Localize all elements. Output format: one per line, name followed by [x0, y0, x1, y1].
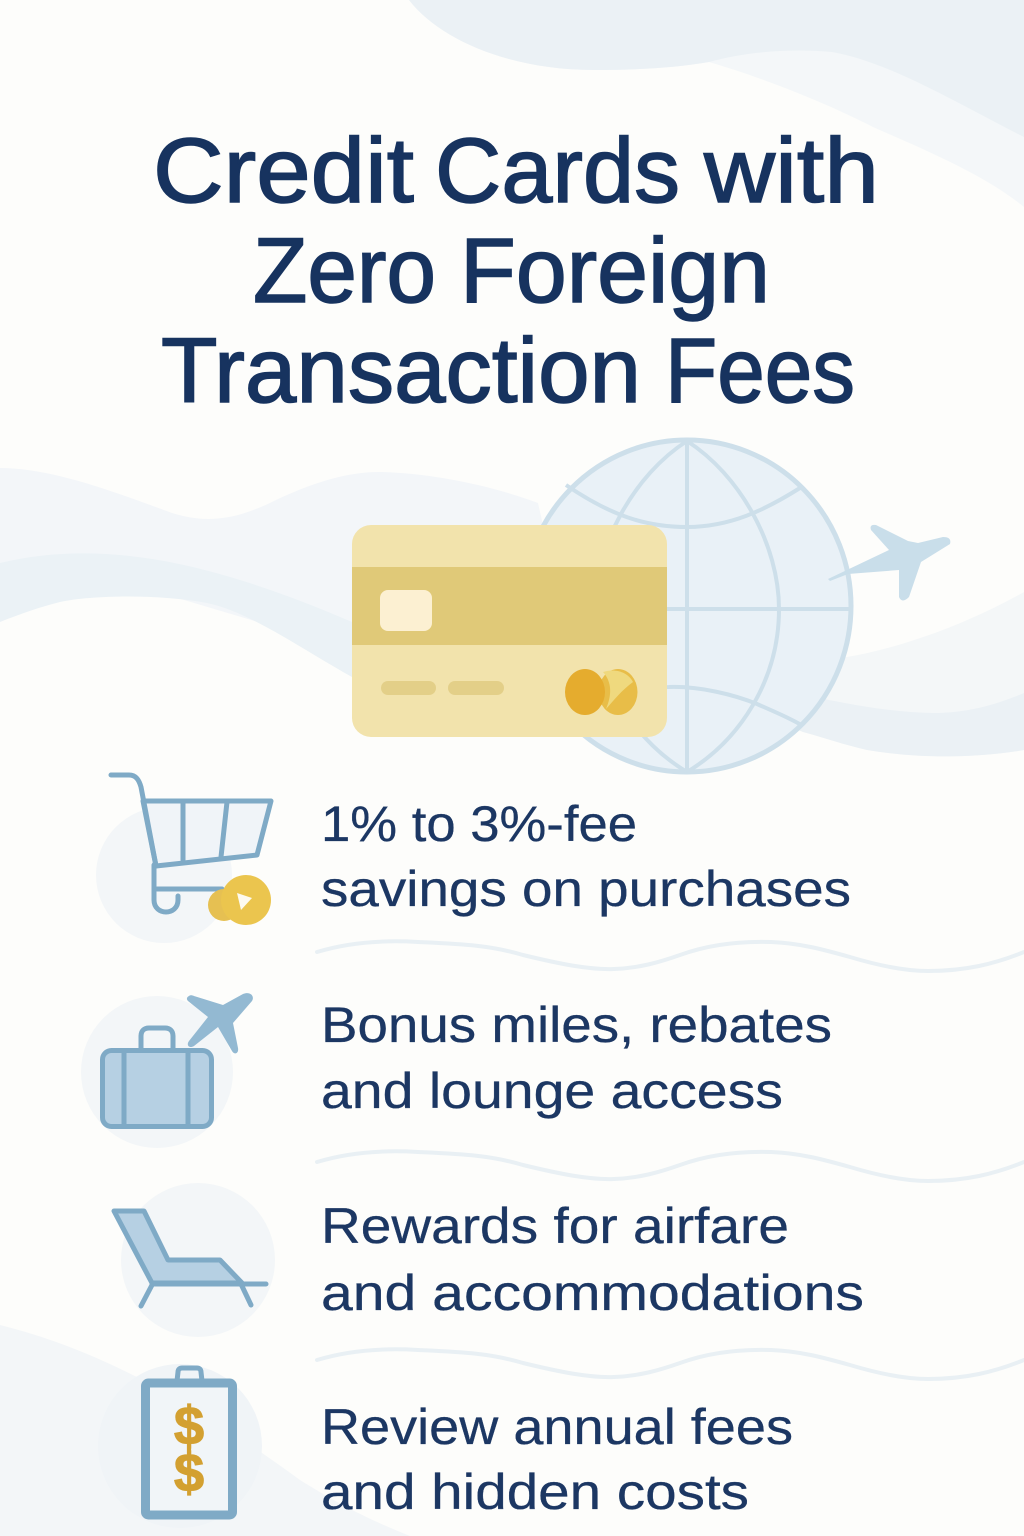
icon: dollar signs [174, 1396, 204, 1503]
text: Bonus miles, rebates [321, 996, 832, 1053]
icon backdrop [96, 807, 232, 943]
title: Fees [665, 320, 855, 422]
title: Foreign [460, 220, 770, 322]
icon: shopping cart [111, 775, 271, 912]
card chip [380, 590, 432, 631]
item 1: savings on purchases [96, 775, 851, 943]
title: Zero [253, 220, 436, 322]
text [321, 1398, 793, 1520]
text [321, 996, 832, 1119]
title: Cards [435, 120, 680, 222]
text: 1% to 3%-fee [321, 795, 637, 852]
icon backdrop [98, 1364, 262, 1528]
icon: globe [522, 440, 851, 772]
item 3: rewards [114, 1183, 864, 1337]
item 4: annual fees [98, 1364, 793, 1528]
icon: airplane [187, 993, 253, 1053]
icon: dollar signs: $ [174, 1443, 204, 1503]
title [153, 120, 879, 422]
dividers [317, 941, 1024, 1379]
text: Rewards for airfare [321, 1197, 789, 1254]
icon: suitcase [102, 1028, 212, 1126]
text: savings on purchases [321, 860, 851, 917]
icon: fee clipboard [146, 1368, 232, 1515]
text [321, 795, 851, 917]
icon: lounge chair [114, 1211, 266, 1306]
title: Credit [153, 120, 414, 222]
card logo [565, 669, 638, 715]
card number bars [381, 681, 504, 695]
icon: credit card [352, 525, 667, 737]
text [321, 1197, 864, 1321]
title: with [703, 120, 879, 222]
icon backdrop [81, 996, 233, 1148]
text: and hidden costs [321, 1463, 749, 1520]
text: Review annual fees [321, 1398, 793, 1455]
title: Transaction [161, 320, 641, 422]
icon: dollar signs: $ [174, 1396, 204, 1456]
icon backdrop [121, 1183, 275, 1337]
icon: airplane [828, 525, 950, 600]
text: and accommodations [321, 1264, 864, 1321]
hero illustration: globe, card and plane [352, 440, 950, 772]
icon: coin [208, 875, 271, 925]
text: and lounge access [321, 1062, 783, 1119]
item 2: miles and lounge [81, 993, 832, 1148]
